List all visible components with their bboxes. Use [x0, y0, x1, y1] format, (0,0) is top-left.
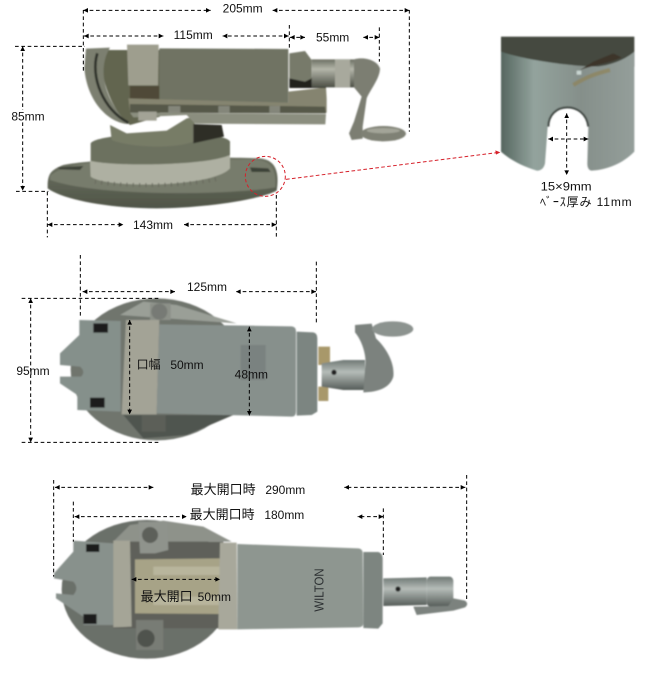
- dimension: jaw width 50mm: 50mm: [170, 358, 204, 372]
- brand mark: WILTON: [312, 568, 326, 612]
- silver jaw: [113, 541, 132, 627]
- back plate: [297, 332, 317, 416]
- back plate: [363, 552, 383, 629]
- main body: [237, 544, 363, 629]
- swivel backing: [100, 50, 160, 125]
- dimension: 55mm: [290, 27, 379, 62]
- brass nuts: [318, 347, 330, 401]
- left jaw: [60, 320, 121, 412]
- dimension: opening 50mm: [132, 579, 231, 604]
- dimension: 85mm: [11, 46, 85, 191]
- dimension: opening 50mm: 最大開口: [141, 589, 193, 604]
- dimension: opening 50mm: 50mm: [198, 590, 231, 604]
- photo: vise open top view: [54, 520, 467, 659]
- silver jaw: [122, 320, 159, 414]
- crank handle: [413, 598, 467, 615]
- grey patch: [241, 345, 266, 380]
- dimension: 180mm: 180mm: [264, 508, 304, 522]
- slide rails: [128, 87, 327, 113]
- spindle: [383, 577, 427, 606]
- main body: [159, 48, 288, 104]
- dimension: 125mm: 125mm: [187, 280, 227, 294]
- photo: slot close-up: [501, 37, 634, 171]
- dimension: jaw width 50mm: 口幅: [137, 357, 161, 372]
- slot dimension arrows: [548, 113, 588, 175]
- crank handle: [355, 324, 394, 392]
- dimension: 180mm: 最大開口時: [190, 507, 255, 522]
- dimension: 290mm: [54, 475, 467, 602]
- photo: vise side view: [48, 45, 406, 208]
- dimension: 205mm: 205mm: [223, 2, 263, 16]
- dimension: 143mm: [47, 192, 276, 237]
- dimension: 290mm: 290mm: [265, 483, 305, 497]
- dimension: 55mm: 55mm: [316, 31, 349, 45]
- dimension: 143mm: 143mm: [133, 218, 173, 232]
- dimension: 205mm: [83, 2, 409, 132]
- photo: vise top view: [60, 298, 413, 440]
- bolt plates: [138, 522, 168, 553]
- swivel base oval: [71, 298, 243, 440]
- panel: base slot detail: [501, 37, 634, 209]
- silver block: [218, 543, 237, 629]
- panel: side view with dimensions: [11, 2, 500, 237]
- dimension: 290mm: 最大開口時: [191, 482, 256, 497]
- turntable with scale: [91, 133, 230, 184]
- dimension: 48mm: 48mm: [235, 367, 268, 381]
- dimension: 48mm: [235, 327, 268, 416]
- dimension: 85mm: 85mm: [11, 109, 45, 123]
- silver jaw: [127, 45, 159, 85]
- swivel base oval: [62, 520, 232, 659]
- curved swivel: [84, 48, 128, 124]
- main body: [157, 324, 296, 417]
- panel: maximum opening view with dimensions: [54, 475, 467, 659]
- base plate: [48, 158, 278, 208]
- dimension: 180mm: [73, 502, 383, 555]
- left jaw: [54, 541, 114, 625]
- red callout circle and leader: [245, 150, 500, 196]
- dimension: jaw width 50mm: [130, 320, 204, 414]
- back plate and spindle: [289, 77, 326, 88]
- dimension: 95mm: [16, 298, 160, 442]
- slot size label: 15×9mm: [541, 179, 592, 193]
- panel: top view with dimensions: [16, 255, 413, 442]
- spindle: [322, 360, 365, 390]
- base thickness label: ﾍﾞｰｽ厚み 11mm: [540, 195, 632, 209]
- dimension: 95mm: 95mm: [16, 364, 50, 378]
- slide: [135, 558, 221, 614]
- crank handle: [349, 58, 380, 140]
- dimension: 125mm: [80, 255, 316, 323]
- dimension: 115mm: 115mm: [174, 28, 213, 42]
